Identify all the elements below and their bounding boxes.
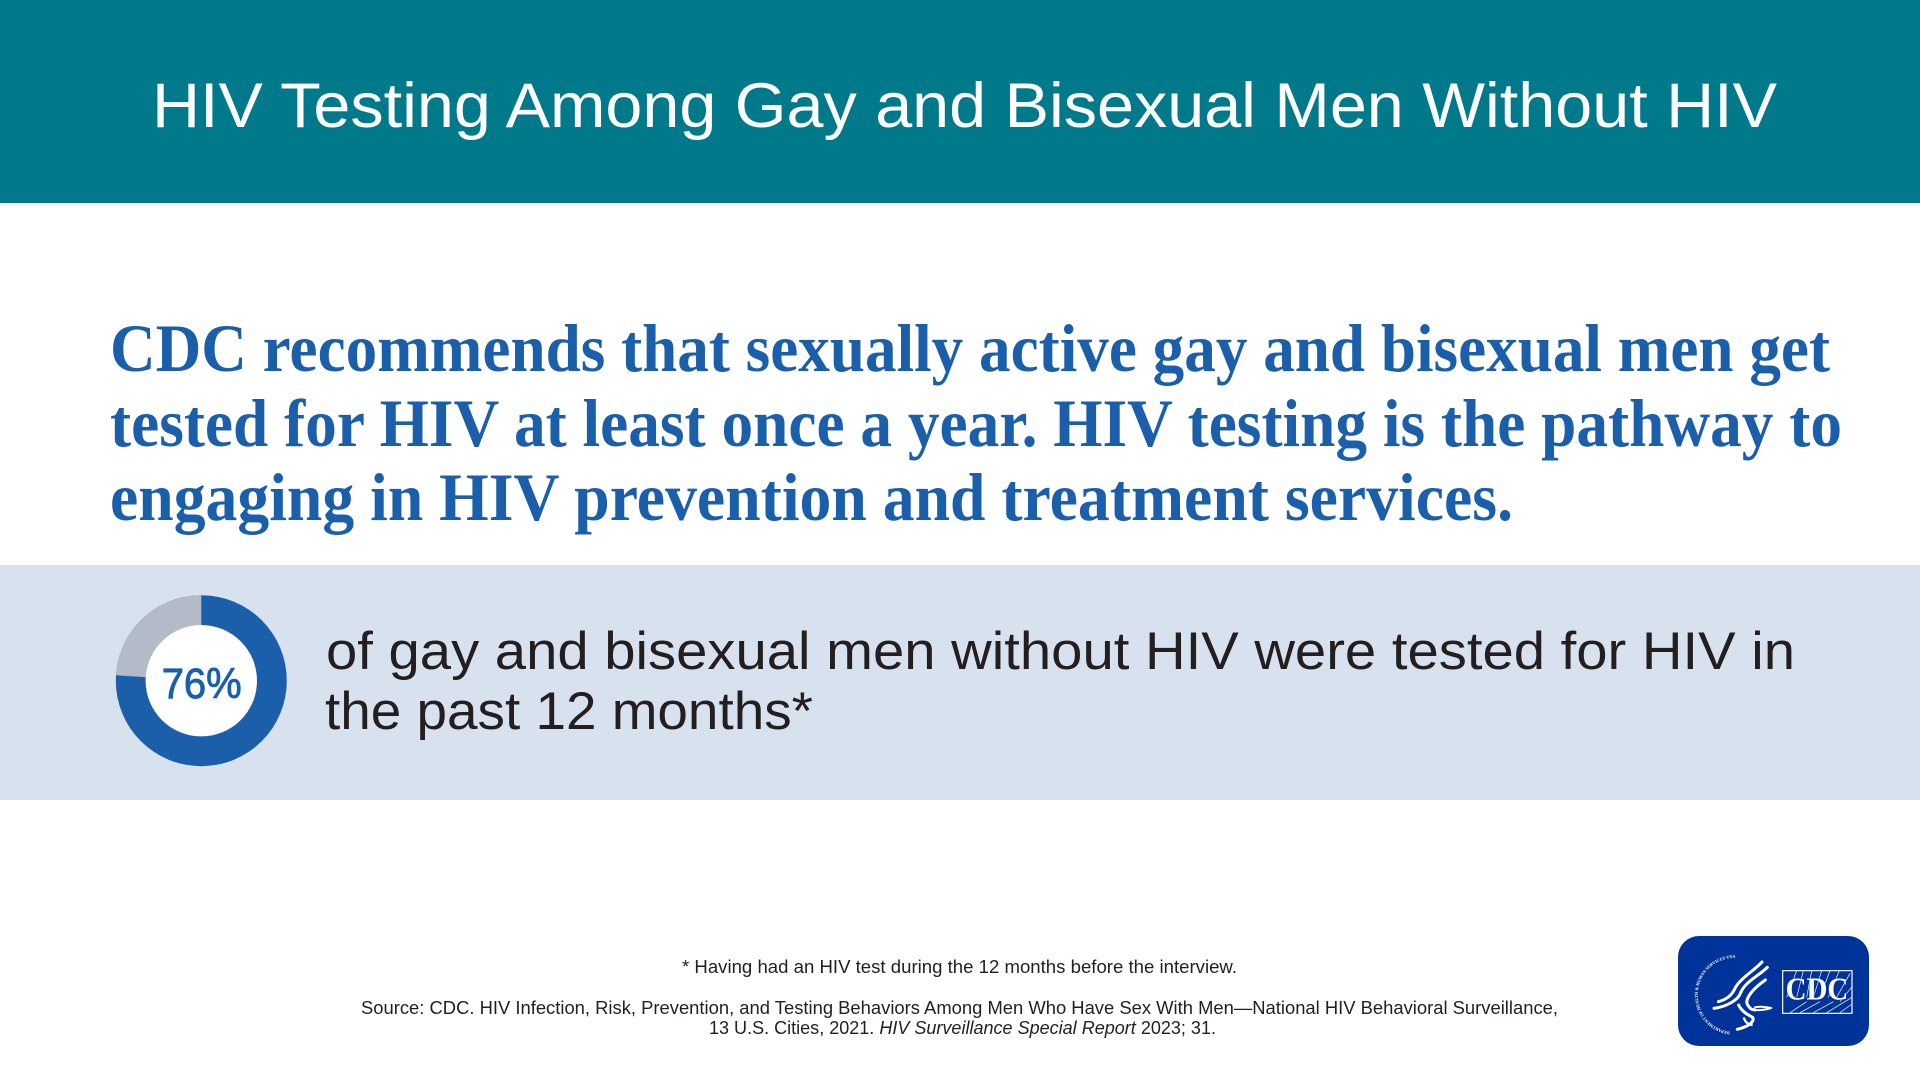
heading: recommendation xyxy=(110,310,1842,535)
statistic text: of gay and bisexual men without HIV were tested for HIV in xyxy=(326,622,1795,681)
logo: HHS and CDC xyxy=(1678,936,1869,1046)
footnote and source: Source: CDC. HIV Infection, Risk, Prevention, and Testing Behaviors Among Men Who Have Sex With Men—National HIV Behavioral Surveillance, xyxy=(361,997,1558,1018)
panel: statistic band xyxy=(0,565,1920,800)
donut value: 76% xyxy=(162,660,242,708)
footnote and source: * Having had an HIV test during the 12 months before the interview. xyxy=(682,956,1237,977)
statistic text: the past 12 months* xyxy=(325,682,813,741)
heading: recommendation: tested for HIV at least once a year. HIV testing is the pathway to xyxy=(110,385,1842,461)
icon: HHS seal text: DEPARTMENT OF HEALTH & HUMAN SERVICES·USA xyxy=(1694,955,1736,1034)
icon: HHS eagle xyxy=(1714,962,1771,1029)
title: HIV Testing Among Gay and Bisexual Men Without HIV xyxy=(152,71,1777,141)
heading: recommendation: CDC recommends that sexually active gay and bisexual men get xyxy=(110,310,1830,386)
footnote and source: 13 U.S. Cities, 2021. HIV Surveillance Special Report 2023; 31. xyxy=(709,1017,1216,1038)
header banner xyxy=(0,0,1920,203)
footnote and source xyxy=(361,956,1558,1038)
statistic text xyxy=(325,622,1795,741)
heading: recommendation: engaging in HIV prevention and treatment services. xyxy=(110,459,1513,535)
icon: CDC box: CDC xyxy=(1786,970,1848,1006)
donut chart: 76% xyxy=(116,595,287,766)
